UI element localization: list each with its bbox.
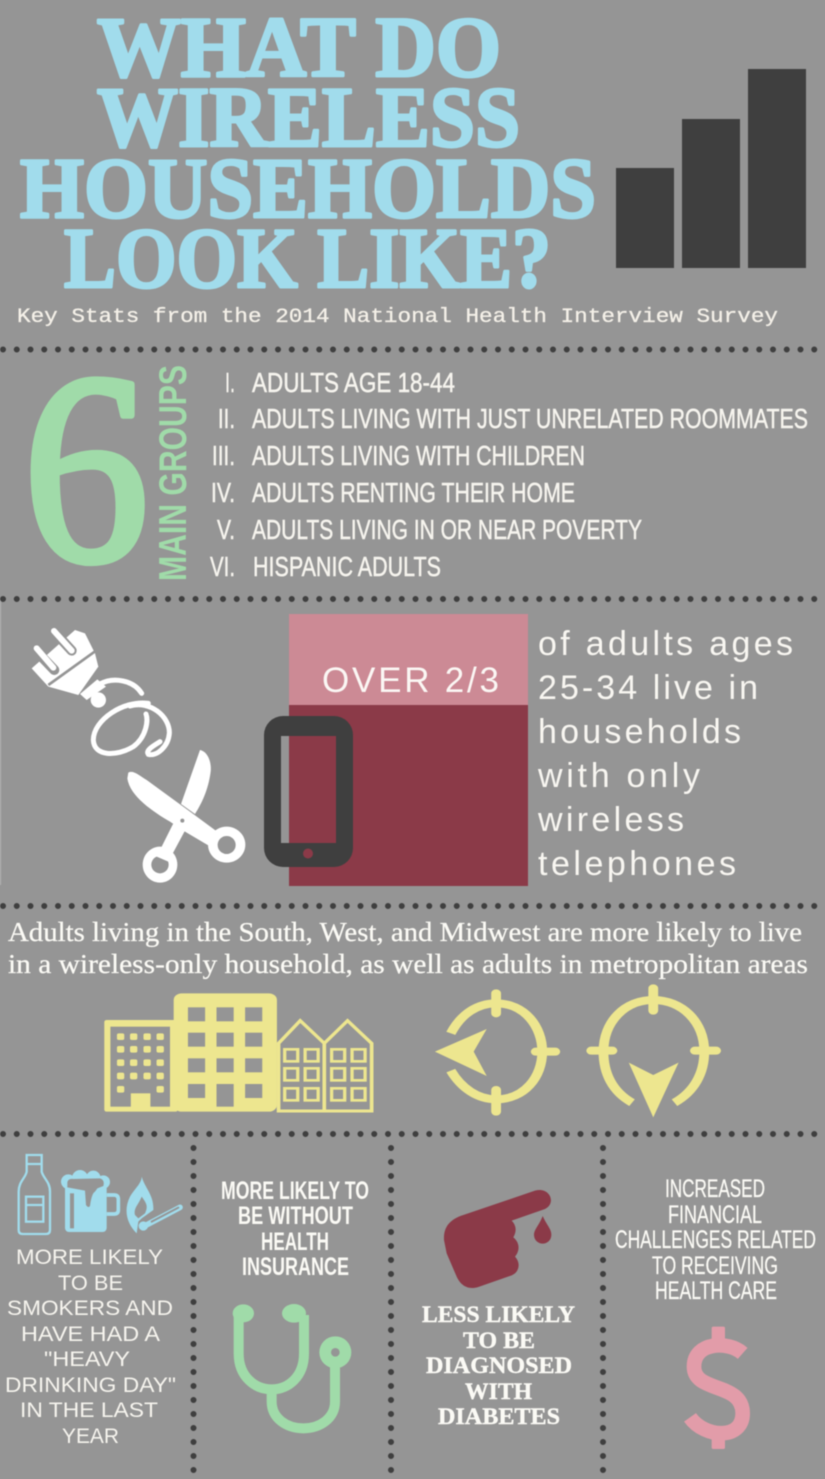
title: HOUSEHOLDS bbox=[20, 140, 596, 236]
icon: stethoscope bbox=[233, 1304, 351, 1428]
location text: Adults living in the South, West, and Midwest are more likely to live bbox=[8, 917, 802, 947]
text: insurance: BE WITHOUT bbox=[238, 1202, 353, 1230]
stat description: households bbox=[538, 713, 741, 751]
icon: compass pointing south bbox=[591, 988, 716, 1117]
icon: lit match bbox=[127, 1177, 180, 1233]
icon: dollar sign bbox=[690, 1327, 743, 1449]
panel: health insurance bbox=[221, 1177, 369, 1428]
icon: bottle bbox=[19, 1155, 50, 1234]
panel: diabetes bbox=[422, 1190, 575, 1430]
text: financial: FINANCIAL bbox=[668, 1201, 762, 1229]
text: insurance bbox=[221, 1177, 369, 1281]
text: smokers: SMOKERS AND bbox=[7, 1297, 173, 1320]
list of groups: ADULTS LIVING WITH CHILDREN bbox=[252, 440, 585, 471]
list of groups: I. bbox=[225, 367, 235, 398]
text: financial: INCREASED bbox=[665, 1175, 765, 1203]
list of groups: ADULTS LIVING IN OR NEAR POVERTY bbox=[252, 514, 642, 545]
text: smokers bbox=[5, 1246, 176, 1448]
icon: signal bars bbox=[616, 69, 806, 268]
panel: six main groups bbox=[23, 318, 808, 619]
text: smokers: IN THE LAST bbox=[20, 1399, 158, 1422]
list of groups: ADULTS AGE 18-44 bbox=[252, 367, 455, 398]
panel: location bbox=[8, 917, 808, 1117]
stat description: telephones bbox=[538, 845, 736, 883]
title: WHAT DO bbox=[97, 0, 501, 95]
icon: unplugged cord bbox=[32, 630, 169, 755]
icon: compass pointing west bbox=[435, 993, 555, 1112]
stat description: of adults ages bbox=[538, 625, 793, 663]
list of groups: II. bbox=[218, 403, 235, 434]
text: insurance: HEALTH bbox=[261, 1228, 329, 1256]
panel: smokers and drinking bbox=[5, 1155, 180, 1448]
text: smokers: MORE LIKELY bbox=[16, 1246, 163, 1269]
text: smokers: TO BE bbox=[58, 1272, 123, 1295]
panel: financial challenges bbox=[615, 1175, 816, 1449]
text: diabetes: WITH bbox=[465, 1379, 532, 1405]
panel: over two thirds bbox=[32, 614, 793, 886]
location text bbox=[8, 917, 808, 979]
stat description: with only bbox=[537, 757, 700, 795]
text: smokers: YEAR bbox=[62, 1425, 119, 1448]
stat description bbox=[537, 625, 793, 883]
list of groups: HISPANIC ADULTS bbox=[253, 551, 441, 582]
stat description: wireless bbox=[537, 801, 684, 839]
text: financial bbox=[615, 1175, 816, 1305]
list of groups: IV. bbox=[211, 477, 235, 508]
list of groups: ADULTS RENTING THEIR HOME bbox=[252, 477, 575, 508]
text: insurance: MORE LIKELY TO bbox=[221, 1177, 369, 1205]
icon: pricked finger bbox=[444, 1190, 551, 1288]
list of groups bbox=[210, 367, 808, 582]
header section bbox=[17, 0, 806, 329]
icon: scissors bbox=[127, 750, 245, 883]
stat box: dark bottom bbox=[289, 705, 528, 886]
text: financial: HEALTH CARE bbox=[655, 1277, 777, 1305]
subtitle: Key Stats from the 2014 National Health Interview Survey bbox=[17, 306, 778, 329]
big number 6: 6 bbox=[23, 318, 149, 619]
text: diabetes: TO BE bbox=[463, 1328, 535, 1354]
list of groups: III. bbox=[212, 440, 235, 471]
icon: smartphone bbox=[264, 716, 353, 867]
icon: beer mug bbox=[61, 1170, 118, 1232]
stat description: 25-34 live in bbox=[538, 669, 758, 707]
icon: city buildings bbox=[104, 993, 372, 1112]
text: diabetes: DIABETES bbox=[438, 1404, 560, 1430]
text: smokers: HAVE HAD A bbox=[21, 1323, 160, 1346]
text: diabetes: LESS LIKELY bbox=[422, 1302, 575, 1328]
text: insurance: INSURANCE bbox=[242, 1253, 349, 1281]
stat box: light top bbox=[289, 614, 528, 705]
location text: in a wireless-only household, as well as adults in metropolitan areas bbox=[8, 949, 808, 979]
rotated label: main groups: MAIN GROUPS bbox=[152, 365, 195, 581]
text: smokers: "HEAVY bbox=[44, 1348, 130, 1371]
title: WIRELESS bbox=[97, 69, 520, 165]
list of groups: VI. bbox=[210, 551, 235, 582]
text: smokers: DRINKING DAY" bbox=[5, 1374, 176, 1397]
stat label: OVER 2/3 bbox=[322, 661, 499, 700]
list of groups: V. bbox=[217, 514, 235, 545]
text: diabetes: DIAGNOSED bbox=[426, 1353, 572, 1379]
title: LOOK LIKE? bbox=[64, 210, 551, 306]
text: diabetes bbox=[422, 1302, 575, 1430]
title bbox=[20, 0, 596, 306]
